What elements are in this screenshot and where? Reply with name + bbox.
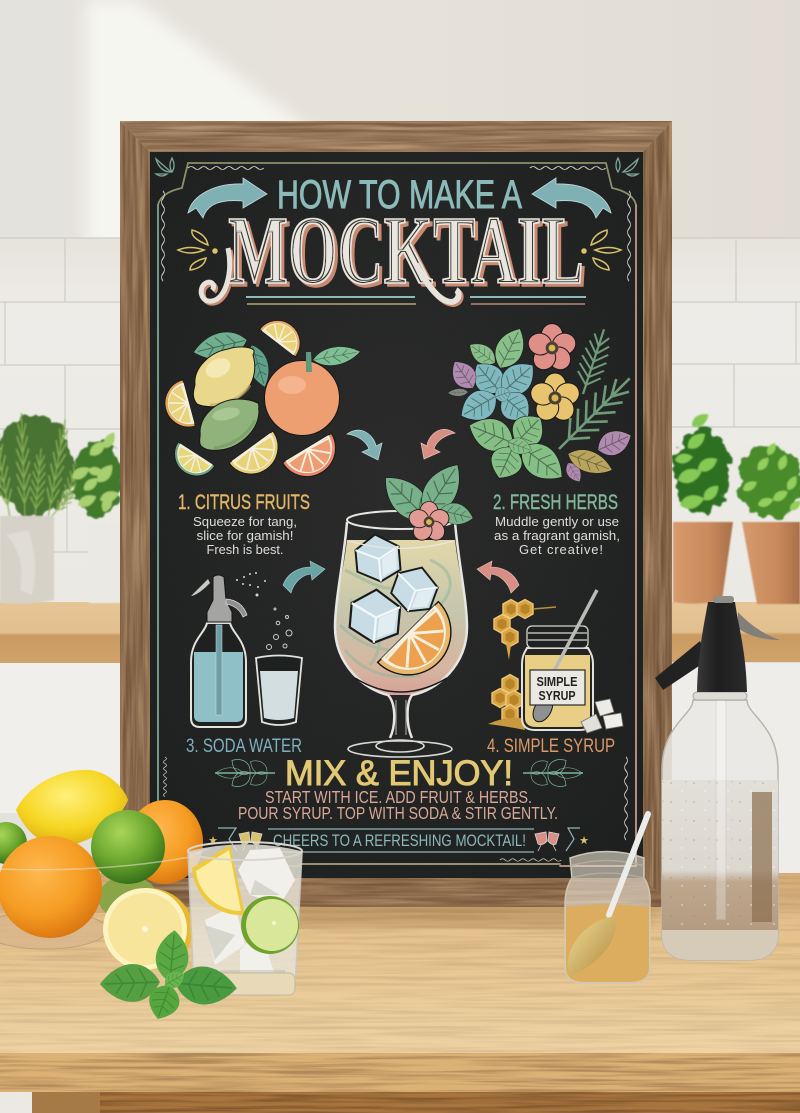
title: mocktail bbox=[201, 197, 587, 307]
corner right bbox=[616, 158, 638, 176]
plant second bbox=[738, 441, 800, 518]
orange stem bbox=[306, 352, 312, 372]
bubbles bbox=[266, 608, 292, 650]
terracotta pot bbox=[673, 522, 733, 604]
description herbs bbox=[494, 515, 620, 557]
heading herbs: 2. FRESH HERBS bbox=[493, 491, 618, 514]
jar bbox=[522, 648, 593, 730]
bowl rim bbox=[0, 848, 210, 870]
corner leaves bbox=[156, 158, 638, 176]
glass body bbox=[188, 845, 302, 995]
bottle water bbox=[194, 652, 243, 722]
soda glass bbox=[256, 656, 302, 725]
chalkboard bbox=[150, 152, 643, 878]
jar threads bbox=[570, 860, 644, 878]
lower wall right bbox=[672, 663, 800, 878]
description citrus: Squeeze for tang, bbox=[193, 515, 297, 529]
jar spoon bowl bbox=[568, 916, 616, 975]
siphon glass bbox=[662, 700, 778, 960]
title: mocktail: MOCKTAIL bbox=[228, 197, 584, 304]
description herbs: Muddle gently or use bbox=[495, 515, 619, 529]
bottle outline bbox=[191, 623, 246, 727]
honeycomb bottom bbox=[488, 674, 525, 730]
drink liquid bbox=[336, 540, 466, 695]
wedge orange bbox=[283, 433, 346, 487]
siphon collar bbox=[693, 692, 747, 700]
illustration: fresh herbs bbox=[446, 323, 640, 490]
chalk border bbox=[158, 163, 636, 866]
jar label: SYRUP bbox=[538, 688, 576, 703]
jar syrup bbox=[566, 904, 649, 982]
title flourish left bbox=[178, 230, 217, 270]
illustration: simple syrup bbox=[488, 590, 623, 733]
spray bbox=[236, 572, 266, 596]
mint sprig bbox=[99, 929, 238, 1024]
arrow: citrus to glass bbox=[347, 430, 382, 460]
leaf right of lemon bbox=[242, 342, 274, 390]
sugar cubes bbox=[581, 699, 623, 733]
banner bbox=[208, 828, 589, 852]
glass stem highlight bbox=[396, 700, 406, 735]
toast icon left bbox=[239, 832, 262, 851]
heading citrus: 1. CITRUS FRUITS bbox=[178, 491, 310, 514]
lemon slice bbox=[192, 845, 245, 915]
orange bbox=[264, 360, 340, 436]
orange slice bbox=[378, 602, 469, 693]
sprig right bbox=[523, 755, 583, 791]
white pot bbox=[87, 523, 120, 603]
spoon bbox=[533, 590, 597, 722]
grey leaf bbox=[448, 388, 468, 397]
description herbs: as a fragrant gamish, bbox=[494, 529, 620, 543]
glass ice bbox=[205, 848, 295, 975]
orange leaf bbox=[311, 343, 362, 369]
arrow: syrup to glass bbox=[477, 561, 519, 593]
arrow: soda to glass bbox=[283, 561, 325, 593]
lemon bbox=[16, 770, 128, 845]
background wall bbox=[0, 0, 800, 880]
wooden frame bbox=[120, 121, 672, 907]
counter edge bbox=[0, 1053, 800, 1092]
siphon lever bbox=[738, 612, 780, 640]
orange back bbox=[127, 800, 203, 884]
ice shadows bbox=[205, 880, 285, 985]
plants right bbox=[673, 410, 800, 604]
jar spoon handle bbox=[609, 814, 648, 915]
glass outline bbox=[335, 511, 467, 738]
sprig left bbox=[215, 755, 275, 791]
heading: mix and enjoy: MIX & ENJOY! bbox=[285, 754, 513, 793]
mint bottom leaf bbox=[143, 980, 184, 1024]
nozzle bbox=[226, 599, 247, 617]
illustration: mocktail glass bbox=[330, 456, 476, 757]
mint left leaf bbox=[99, 963, 161, 1003]
soda siphon bottle bbox=[655, 596, 780, 960]
ice cube three bbox=[346, 586, 405, 647]
text: soda water: 3. SODA WATER bbox=[186, 736, 302, 757]
glass fruit bowl with citrus bbox=[0, 770, 210, 949]
garnish flower bbox=[407, 502, 451, 544]
wedge left bbox=[160, 380, 195, 432]
counter base bbox=[0, 1092, 800, 1113]
arrow: herbs to glass bbox=[421, 429, 455, 459]
title: mocktail: MOCKTAIL bbox=[231, 200, 587, 307]
drinking glass bbox=[188, 842, 302, 995]
garnish leaves bbox=[374, 456, 476, 531]
description citrus bbox=[193, 515, 297, 557]
lever bbox=[191, 579, 210, 596]
siphon head bbox=[207, 575, 232, 622]
star right: ★ bbox=[579, 835, 589, 847]
leafy plant bbox=[69, 430, 123, 516]
description citrus: slice for gamish! bbox=[196, 529, 294, 543]
basil green bbox=[464, 407, 571, 490]
corner left bbox=[156, 158, 174, 176]
banner text: CHEERS TO A REFRESHING MOCKTAIL! bbox=[273, 831, 526, 850]
text: citrus fruits bbox=[178, 491, 310, 557]
toast icon right bbox=[535, 832, 559, 851]
lid bbox=[527, 626, 588, 648]
shelf right bbox=[672, 602, 800, 662]
siphon water bbox=[660, 780, 780, 960]
mint right leaf bbox=[173, 964, 238, 1007]
jar label: SIMPLE bbox=[536, 674, 578, 689]
title underlines bbox=[246, 297, 586, 304]
lime under bowl bbox=[98, 876, 158, 920]
jar label bbox=[530, 670, 585, 705]
honeycomb top bbox=[494, 600, 556, 660]
plant in terracotta bbox=[674, 410, 730, 514]
syrup bbox=[525, 655, 590, 727]
green leaves top bbox=[465, 323, 532, 374]
lime slice bbox=[241, 896, 299, 954]
jar glass bbox=[565, 852, 650, 983]
text: fresh herbs bbox=[493, 491, 620, 557]
lime center bbox=[91, 810, 165, 884]
lemon half bbox=[103, 888, 193, 970]
siphon spout bbox=[655, 641, 708, 690]
pink flower bbox=[525, 324, 579, 374]
wedge lime bbox=[166, 442, 215, 484]
bowl plate bbox=[0, 911, 107, 949]
lower wall bbox=[0, 663, 120, 813]
rosemary plant bbox=[0, 413, 92, 520]
mint blue bbox=[454, 354, 542, 429]
banner lines bbox=[218, 828, 580, 852]
ice cube one bbox=[355, 534, 401, 582]
lime bbox=[200, 399, 259, 450]
glass rim bbox=[188, 842, 302, 860]
plants left bbox=[0, 413, 123, 604]
orange front bbox=[0, 836, 102, 938]
gold leaf bbox=[564, 444, 616, 480]
instructions: POUR SYRUP. TOP WITH SODA & STIR GENTLY. bbox=[238, 803, 558, 823]
title flourish right bbox=[582, 230, 621, 270]
counter top bbox=[0, 873, 800, 1054]
arrow: top right bbox=[532, 178, 611, 218]
glass base bbox=[199, 973, 295, 995]
arrow: top left bbox=[188, 178, 267, 218]
wedge top bbox=[260, 311, 309, 357]
tube bbox=[216, 625, 222, 715]
lemon bbox=[193, 347, 255, 407]
terracotta pot second bbox=[742, 522, 800, 604]
illustration: soda siphon bbox=[191, 572, 302, 727]
glass foot bbox=[348, 740, 452, 757]
yellow flower bbox=[528, 373, 582, 425]
description herbs: Get creative! bbox=[519, 542, 603, 557]
ice cube two bbox=[385, 560, 444, 619]
siphon cap bbox=[713, 596, 734, 603]
rosemary sprigs bbox=[548, 325, 640, 460]
instructions bbox=[238, 787, 558, 823]
leaf on lemon bbox=[190, 327, 250, 365]
siphon head bbox=[697, 602, 747, 692]
shelf left bbox=[0, 602, 122, 663]
white stone pot bbox=[0, 516, 54, 604]
chalk squiggles bbox=[162, 166, 630, 861]
star left: ★ bbox=[208, 835, 218, 847]
heading: how to make a: HOW TO MAKE A bbox=[277, 173, 522, 217]
text: simple syrup: 4. SIMPLE SYRUP bbox=[487, 736, 615, 757]
siphon tube bbox=[716, 700, 726, 920]
syrup jar bbox=[565, 814, 650, 983]
wedge lemon bbox=[229, 431, 289, 485]
purple leaves bbox=[446, 355, 636, 485]
mint small leaf bbox=[161, 967, 188, 992]
tiled wall bbox=[0, 238, 800, 870]
description citrus: Fresh is best. bbox=[206, 543, 284, 557]
mint top leaf bbox=[154, 929, 191, 983]
instructions: START WITH ICE. ADD FRUIT & HERBS. bbox=[265, 787, 532, 807]
illustration: citrus fruits bbox=[160, 311, 362, 487]
lime far left bbox=[0, 822, 27, 864]
